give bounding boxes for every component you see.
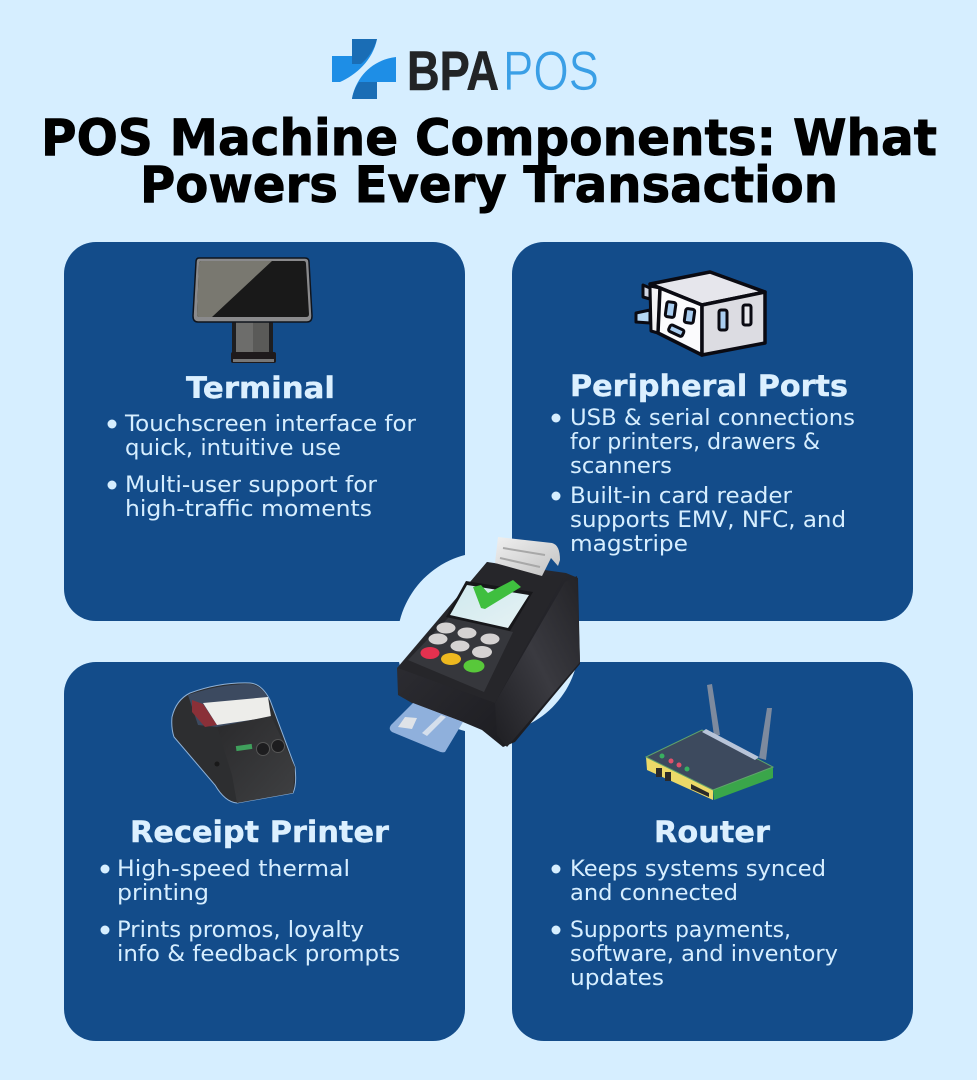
bullet list: peripheral ports: USB & serial connections bbox=[570, 405, 855, 431]
right side wing bbox=[495, 576, 580, 747]
icon: router bbox=[646, 684, 773, 800]
icon: terminal bbox=[193, 258, 312, 363]
screen bezel bbox=[446, 581, 533, 631]
title bbox=[41, 109, 937, 214]
bullet list: peripheral ports: for printers, drawers & bbox=[570, 429, 820, 455]
check mark bbox=[473, 580, 521, 609]
bullet list: router: updates bbox=[570, 965, 664, 991]
heading: Peripheral Ports: Peripheral Ports bbox=[570, 369, 848, 403]
bullet list: peripheral ports: Built-in card reader bbox=[570, 483, 793, 509]
heading: Router: Router bbox=[654, 815, 771, 849]
heading: Receipt Printer: Receipt Printer bbox=[130, 815, 390, 849]
bullet list: terminal: high-traffic moments bbox=[125, 496, 372, 522]
bullet list: peripheral ports: magstripe bbox=[570, 531, 688, 557]
panel: peripheral ports bbox=[512, 242, 913, 621]
icon: ports block bbox=[636, 272, 765, 355]
receipt bbox=[495, 537, 560, 576]
heading: Terminal: Terminal bbox=[186, 371, 335, 405]
card and chip bbox=[390, 703, 463, 752]
panel: receipt printer bbox=[64, 662, 465, 1041]
screen bbox=[450, 585, 529, 628]
panel: router bbox=[512, 662, 913, 1041]
icon: POS machine bbox=[390, 537, 580, 752]
bullet list: peripheral ports bbox=[552, 405, 855, 557]
bullet list: receipt printer: Prints promos, loyalty bbox=[117, 917, 364, 943]
machine base bbox=[397, 562, 580, 747]
center circle bbox=[397, 552, 579, 734]
bullet list: peripheral ports: scanners bbox=[570, 453, 672, 479]
top face bbox=[398, 562, 563, 703]
title: Powers Every Transaction bbox=[140, 156, 838, 214]
logo: BPA POS bbox=[332, 39, 599, 102]
logo: BPA POS: POS bbox=[503, 39, 599, 102]
bullet list: peripheral ports: supports EMV, NFC, and bbox=[570, 507, 846, 533]
logo: BPA POS: BPA bbox=[407, 39, 499, 102]
bullet list: receipt printer bbox=[100, 856, 400, 967]
icon: receipt printer bbox=[172, 683, 296, 803]
keypad buttons bbox=[420, 622, 500, 672]
bullet list: router: Supports payments, bbox=[570, 917, 791, 943]
bullet list: terminal: quick, intuitive use bbox=[125, 435, 341, 461]
bullet list: receipt printer: High-speed thermal bbox=[117, 856, 350, 882]
bullet list: router: Keeps systems synced bbox=[570, 856, 826, 882]
title: POS Machine Components: What bbox=[41, 109, 937, 167]
bullet list: router: and connected bbox=[570, 880, 738, 906]
bullet list: router bbox=[552, 856, 838, 991]
bullet list: router: software, and inventory bbox=[570, 941, 838, 967]
bullet list: terminal: Multi-user support for bbox=[125, 472, 378, 498]
bullet list: terminal bbox=[108, 411, 417, 522]
keypad area bbox=[408, 617, 513, 692]
bullet list: receipt printer: printing bbox=[117, 880, 209, 906]
panel: terminal bbox=[64, 242, 465, 621]
bullet list: receipt printer: info & feedback prompts bbox=[117, 941, 400, 967]
bullet list: terminal: Touchscreen interface for bbox=[124, 411, 417, 437]
